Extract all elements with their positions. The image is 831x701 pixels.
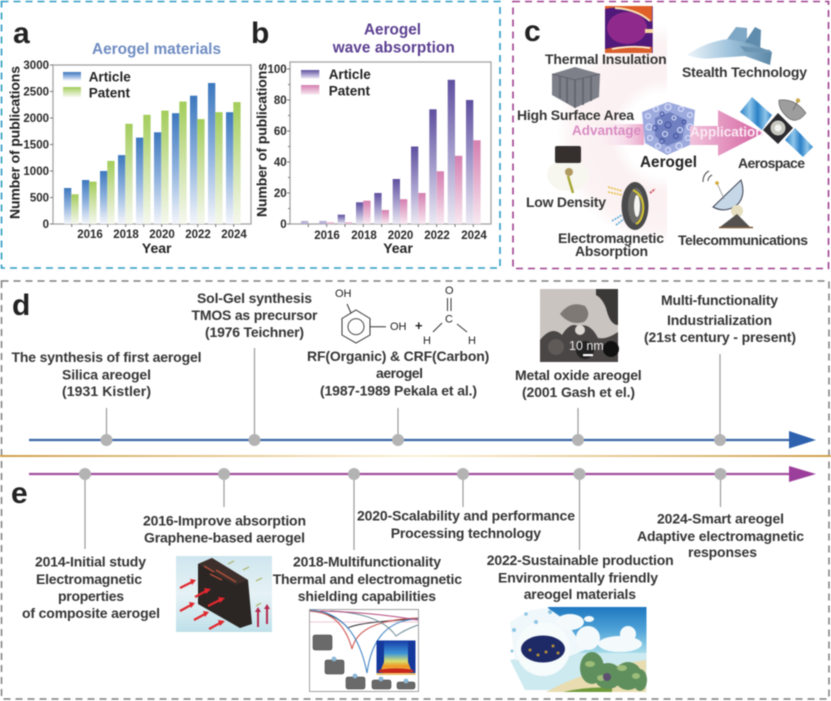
chemical structures: O [445,285,454,297]
milestone 1987-1989 [307,348,489,446]
label: low density: Low Density [526,194,606,210]
chemical structures: OH [335,288,352,300]
milestone 2014: Electromagnetic [36,571,142,587]
bar chart b: Year [383,240,413,256]
panel a: aerogel materials chart [2,2,500,268]
bar chart a: Number of publications [6,66,22,219]
milestone 1931: Silica areogel [62,367,151,383]
milestone 2018 [273,468,462,604]
bar chart b: 100 [268,64,287,76]
label: thermal insulation: Thermal Insulation [545,51,667,67]
panel letter d: d [12,289,30,322]
chemical structures [335,285,476,347]
label: advantage: Advantage [572,123,641,138]
icon: thermal image [605,6,653,53]
bar chart a: 3000 [23,60,49,72]
bar chart b: Number of publications [254,63,270,217]
chart title b: Aerogel [364,22,421,39]
milestone 1931: (1931 Kistler) [62,383,151,399]
milestone 21st century: Multi-functionality [661,292,778,308]
bar chart b: 2018 [351,230,377,242]
milestone 2022: Environmentally friendly [498,570,658,586]
milestone 2024 [637,468,804,560]
bar chart a: 2500 [23,86,49,98]
panel letter b: b [251,17,269,50]
image: graphene aerogel block [176,556,272,632]
timeline arrow d [29,431,816,448]
bar chart a: 2020 [149,229,175,241]
milestone 2016: 2016-Improve absorption [143,513,306,529]
image: sustainable beach scene [510,607,647,692]
bar chart b [254,62,491,256]
divider between timelines [0,455,831,457]
chemical structures: + [415,318,423,333]
timeline arrow e [29,466,816,482]
legend b [301,67,371,98]
label: high surface area: High Surface Area [517,107,634,123]
milestone 2018: Thermal and electromagnetic [273,571,462,587]
milestone 2022: 2022-Sustainable production [487,552,674,568]
panel d and e outer frame [2,281,829,699]
panel c: advantages and applications [513,2,828,268]
legend a [63,70,131,100]
milestone 2016 [143,468,306,546]
label: stealth technology: Stealth Technology [682,64,807,80]
chart title b: wave absorption [332,39,455,56]
chemical structures: C [445,314,453,326]
milestone 1976 [192,290,318,446]
legend a: Article [89,70,131,84]
icon: satellite dish [703,171,753,228]
milestone 1987-1989: (1987-1989 Pekala et al.) [320,383,477,399]
icon: stealth jet [687,27,772,65]
label: aerogel: Aerogel [640,154,697,171]
panel letter a: a [13,17,30,50]
bar chart a: 0 [43,219,49,231]
milestone 2020: Processing technology [391,525,541,541]
bar chart a [6,60,251,256]
milestone 2024: Adaptive electromagnetic [637,528,804,544]
milestone 2016: Graphene-based aerogel [144,530,305,546]
milestone 2001 [515,367,642,446]
bar chart b: 2016 [314,230,340,242]
milestone 2020 [357,468,575,541]
label: application: Application [690,124,764,140]
milestone 21st century: (21st century - present) [644,329,796,345]
panel e: wave absorption timeline [11,466,816,692]
icon: dandelion with block [547,146,589,193]
milestone 2001: Metal oxide areogel [515,367,642,383]
milestone 1976: TMOS as precursor [192,307,318,323]
milestone 2020: 2020-Scalability and performance [357,508,575,524]
milestone 2014: properties [58,588,124,604]
milestone 2014: of composite aerogel [22,605,160,621]
icon: tire with absorption arrows [608,182,655,230]
panel letter e: e [11,477,28,510]
panel b: aerogel wave absorption chart [251,17,491,256]
milestone 1987-1989: RF(Organic) & CRF(Carbon) [307,348,489,364]
milestone 1976: Sol-Gel synthesis [197,290,312,306]
bar chart a: 500 [30,192,49,204]
milestone 21st century [644,292,796,446]
milestone 2024: responses [688,544,757,560]
legend b: Patent [329,84,370,98]
bar chart b: 2022 [424,230,450,242]
image: TEM micrograph [540,289,619,362]
milestone 2022: areogel materials [524,586,636,602]
panel letter c: c [524,15,541,48]
milestone 2018: shielding capabilities [298,588,436,604]
bar chart a: Year [142,240,172,256]
bar chart a: 1500 [23,140,49,152]
milestone 21st century: Industrialization [667,312,772,328]
milestone 1931: The synthesis of first aerogel [12,349,202,365]
milestone 2001: (2001 Gash et el.) [522,384,635,400]
bar chart a: 2000 [23,113,49,125]
legend b: Article [329,67,371,82]
image: TEM micrograph: 10 nm [569,339,604,353]
chemical structures: H [423,335,431,347]
icon: aerogel cube [642,102,695,155]
bar chart b: 20 [274,188,287,200]
legend a: Patent [89,86,130,100]
bar chart b: 60 [274,126,287,138]
chart title a: Aerogel materials [92,41,221,58]
label: telecommunications: Telecommunications [678,232,808,248]
milestone 1987-1989: aerogel [376,365,423,381]
bar chart a: 2022 [185,229,211,241]
chart title b [332,22,455,56]
label: electromagnetic absorption: Absorption [575,243,648,259]
label: aerospace: Aerospace [738,155,805,171]
milestone 2014: 2014-Initial study [35,554,146,570]
bar chart a: 2018 [113,229,139,241]
icon: high surface area block [552,67,600,108]
milestone 2018: 2018-Multifunctionality [293,554,441,570]
bar chart b: 2020 [388,230,413,242]
bar chart b: 80 [274,95,287,107]
bar chart a: 2016 [77,229,103,241]
milestone 2014 [22,468,160,621]
chemical structures: H [468,335,476,347]
milestone 1976: (1976 Teichner) [205,324,304,340]
icon: satellite [740,97,813,157]
bar chart a: 1000 [23,166,49,178]
arrow: advantage [590,124,644,145]
milestone 2022 [487,468,674,602]
bar chart b: 0 [280,219,287,231]
arrow: application [690,110,763,156]
panel d: aerogel history timeline [12,285,816,448]
milestone 2024: 2024-Smart areogel [657,511,784,527]
bar chart b: 40 [274,157,287,169]
label: electromagnetic absorption: Electromagnetic [558,230,664,246]
bar chart a: 2024 [221,229,247,241]
label: electromagnetic absorption [558,230,664,259]
chemical structures: OH [390,321,407,333]
bar chart b: 2024 [461,230,487,242]
image: reflection loss chart [310,610,418,692]
milestone 1931 [12,349,202,446]
